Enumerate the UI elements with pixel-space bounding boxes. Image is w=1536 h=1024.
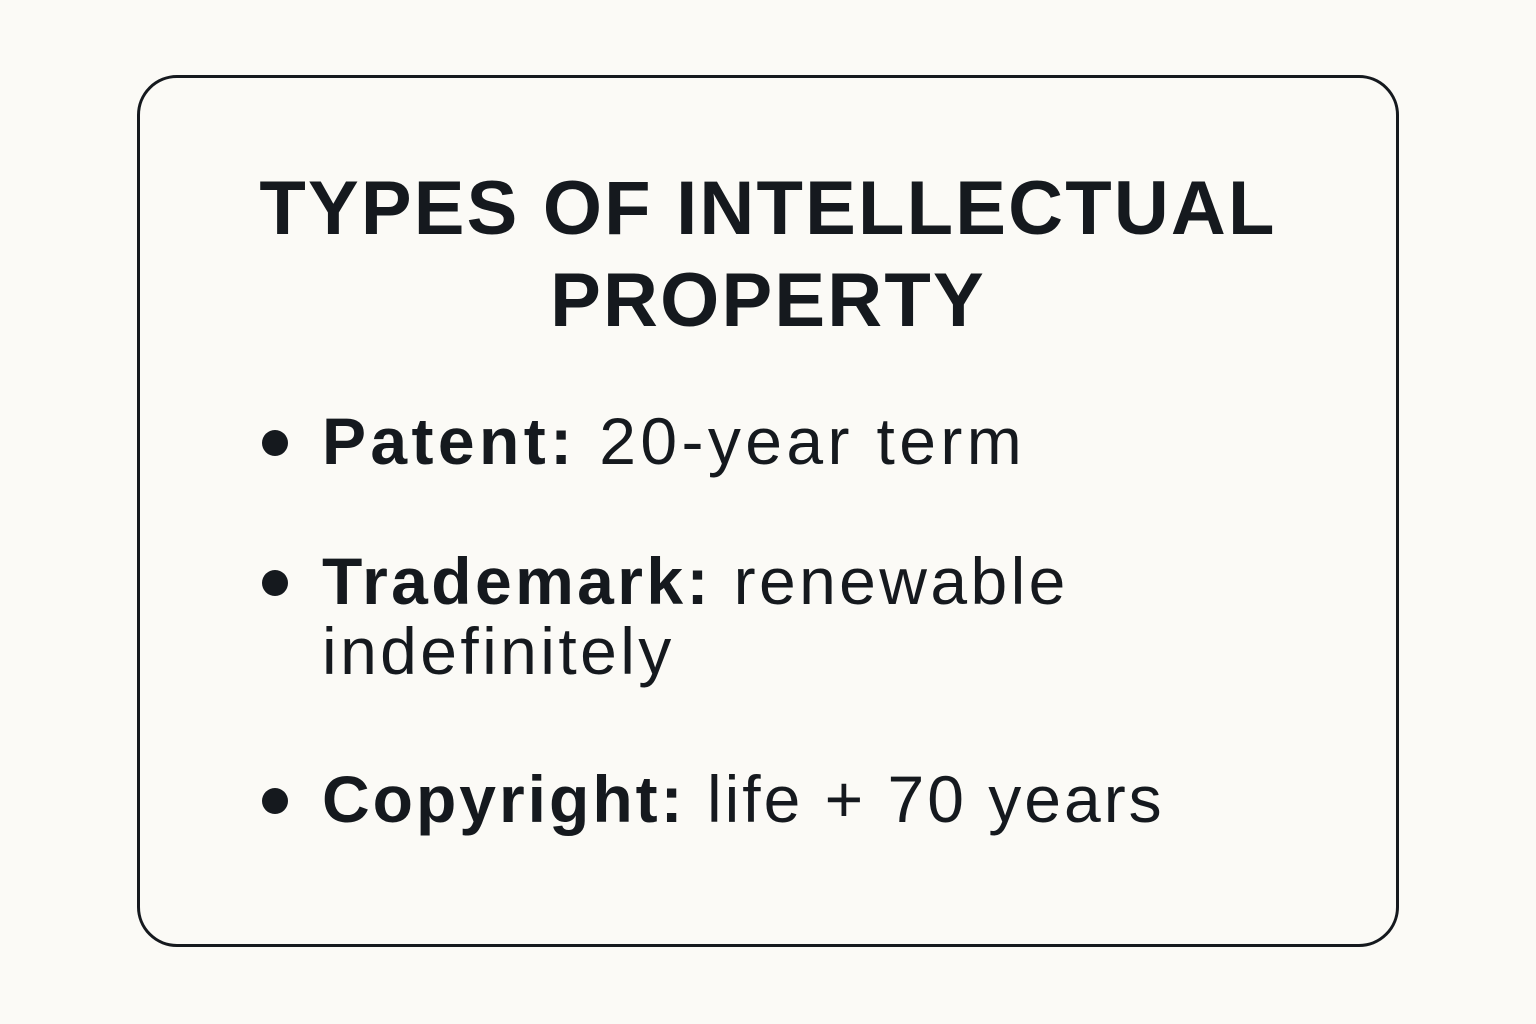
item: trademark	[322, 544, 1069, 688]
bullet: trademark	[262, 570, 288, 596]
title: TYPES OF INTELLECTUAL	[259, 166, 1277, 251]
item: patent: Patent: 20-year term	[322, 404, 1026, 478]
item: trademark: Trademark: renewable	[322, 544, 1069, 618]
item: trademark: indefinitely	[322, 614, 675, 688]
item: copyright: Copyright: life + 70 years	[322, 762, 1165, 836]
title: PROPERTY	[550, 258, 986, 343]
bullet: patent	[262, 430, 288, 456]
bullet: copyright	[262, 788, 288, 814]
panel: card	[137, 75, 1399, 947]
title	[259, 166, 1277, 343]
